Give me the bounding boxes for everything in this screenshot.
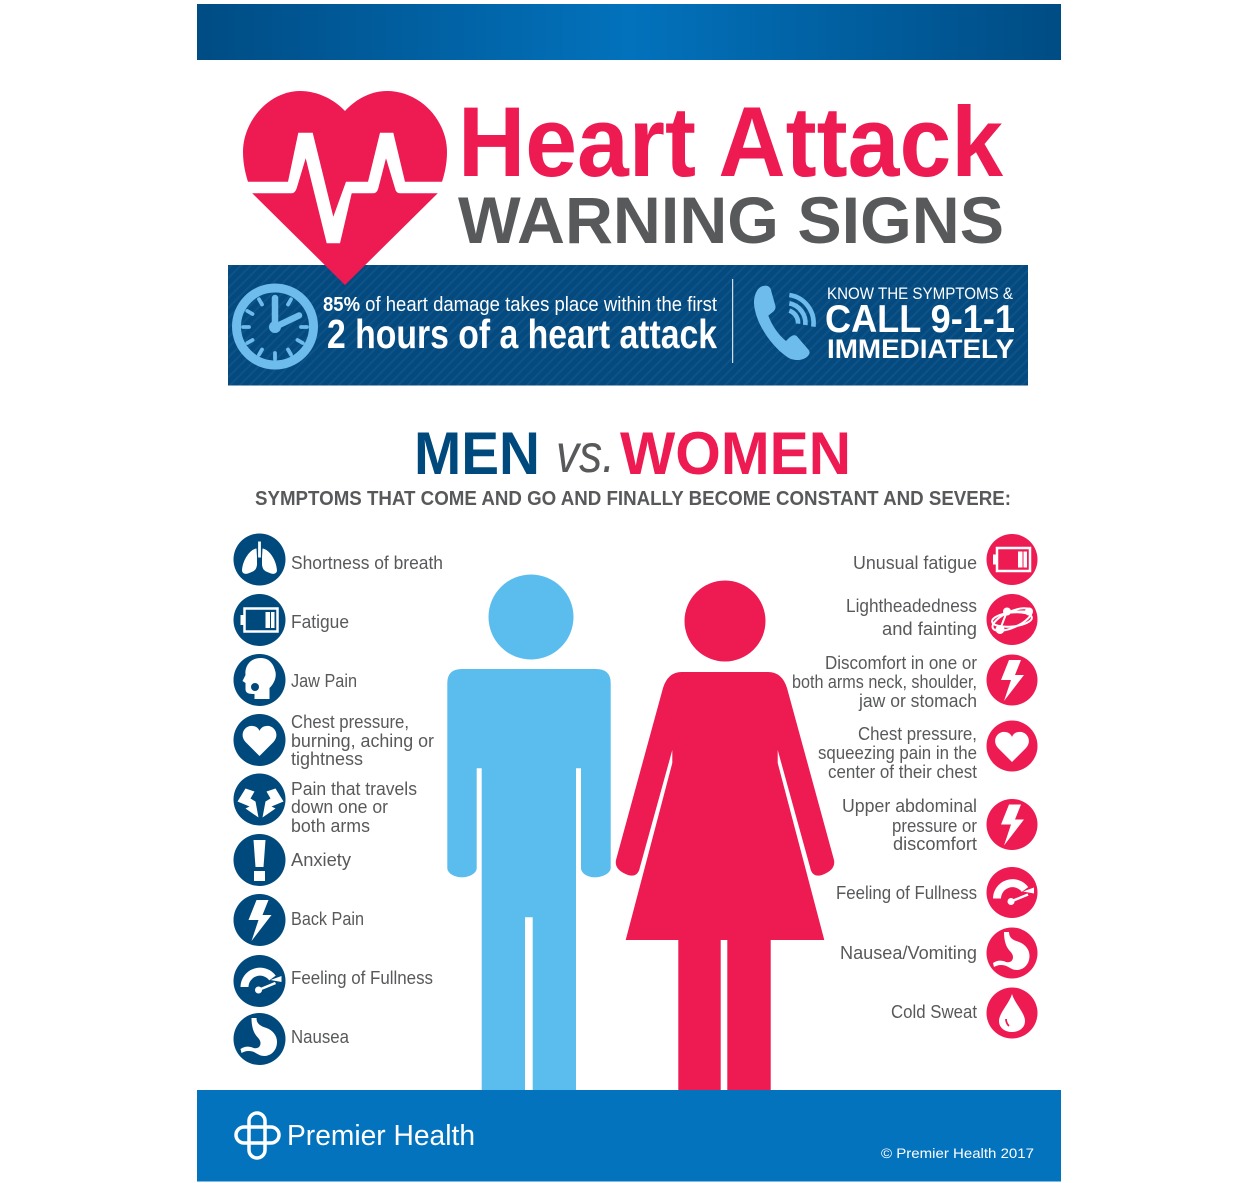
symptom: unusual fatigue: Unusual fatigue [853, 553, 977, 573]
symptom: feeling of fullness [234, 955, 433, 1007]
symptom: chest pressure: Chest pressure, [858, 724, 977, 744]
symptom: back pain [234, 894, 364, 946]
symptom: fatigue [234, 594, 349, 646]
symptom: anxiety [234, 834, 351, 886]
panel: women symptoms [792, 534, 1038, 1038]
symptom: arm pain: Pain that travels [291, 779, 417, 799]
symptom: feeling of fullness: Feeling of Fullness [836, 883, 977, 903]
text: 2 hours of a heart attack: 2 hours of a heart attack [327, 311, 717, 357]
symptom: arm pain [234, 774, 417, 836]
heading: men vs women: vs. [556, 424, 615, 484]
subheading: SYMPTOMS THAT COME AND GO AND FINALLY BECOME CONSTANT AND SEVERE: [255, 488, 1011, 510]
symptom: upper abdominal pressure: discomfort [893, 834, 977, 854]
title: warning signs: WARNING SIGNS [458, 183, 1004, 257]
text: know the symptoms: KNOW THE SYMPTOMS & [827, 285, 1013, 303]
symptom: chest pressure: tightness [291, 749, 363, 769]
symptom: unusual fatigue [853, 534, 1038, 585]
symptom: feeling of fullness [836, 867, 1038, 918]
symptom: arm pain: both arms [291, 816, 370, 836]
text: copyright: © Premier Health 2017 [881, 1145, 1034, 1161]
top gradient bar [197, 4, 1061, 60]
symptom: upper abdominal pressure: pressure or [892, 816, 977, 836]
icon: clock [236, 288, 314, 365]
heading: men vs women: MEN [414, 420, 540, 487]
heading: men vs women: WOMEN [620, 420, 851, 487]
symptom: nausea: Nausea [291, 1027, 350, 1047]
title: heart attack: Heart Attack [458, 86, 1004, 197]
text: 85% of heart damage: 85% of heart damage takes place within the first [323, 294, 717, 316]
symptom: chest pressure: Chest pressure, [291, 712, 409, 732]
symptom: arm and neck discomfort: Discomfort in one or [825, 653, 977, 673]
symptom: anxiety: Anxiety [291, 850, 351, 870]
icon: phone [754, 286, 814, 360]
text: premier health: Premier Health [287, 1120, 475, 1152]
symptom: cold sweat [891, 988, 1038, 1038]
symptom: jaw pain: Jaw Pain [291, 671, 357, 691]
logo: premier health mark [236, 1113, 279, 1158]
symptom: back pain: Back Pain [291, 909, 364, 929]
symptom: arm and neck discomfort [792, 653, 1038, 711]
figure: woman [616, 580, 834, 1090]
figure: man [447, 574, 611, 1090]
divider [732, 279, 733, 363]
symptom: arm pain: down one or [291, 797, 388, 817]
text: call 9-1-1: CALL 9-1-1 [825, 298, 1015, 341]
symptom: feeling of fullness: Feeling of Fullness [291, 968, 433, 988]
symptom: nausea [234, 1013, 350, 1065]
symptom: chest pressure [234, 712, 434, 769]
symptom: fatigue: Fatigue [291, 612, 349, 632]
symptom: shortness of breath: Shortness of breath [291, 553, 443, 573]
heading: men vs women [414, 420, 851, 487]
panel: men symptoms [234, 534, 443, 1065]
symptom: chest pressure: burning, aching or [291, 731, 434, 751]
text: immediately: IMMEDIATELY [827, 334, 1014, 364]
symptom: arm and neck discomfort: both arms neck, shoulder, [792, 672, 977, 692]
urgency banner [228, 265, 1028, 386]
symptom: lightheadedness [846, 594, 1038, 645]
symptom: arm and neck discomfort: jaw or stomach [858, 691, 977, 711]
symptom: lightheadedness: Lightheadedness [846, 596, 977, 616]
symptom: cold sweat: Cold Sweat [891, 1002, 977, 1022]
symptom: chest pressure [818, 720, 1038, 782]
symptom: upper abdominal pressure [842, 796, 1038, 854]
symptom: nausea and vomiting [840, 928, 1038, 978]
symptom: chest pressure: center of their chest [828, 762, 977, 782]
footer [197, 1090, 1061, 1182]
symptom: upper abdominal pressure: Upper abdominal [842, 796, 977, 816]
symptom: lightheadedness: and fainting [882, 619, 977, 639]
symptom: jaw pain [234, 654, 357, 706]
icon: heart with ECG line [240, 91, 450, 285]
symptom: chest pressure: squeezing pain in the [818, 743, 977, 763]
symptom: nausea and vomiting: Nausea/Vomiting [840, 943, 977, 963]
symptom: shortness of breath [234, 534, 443, 586]
